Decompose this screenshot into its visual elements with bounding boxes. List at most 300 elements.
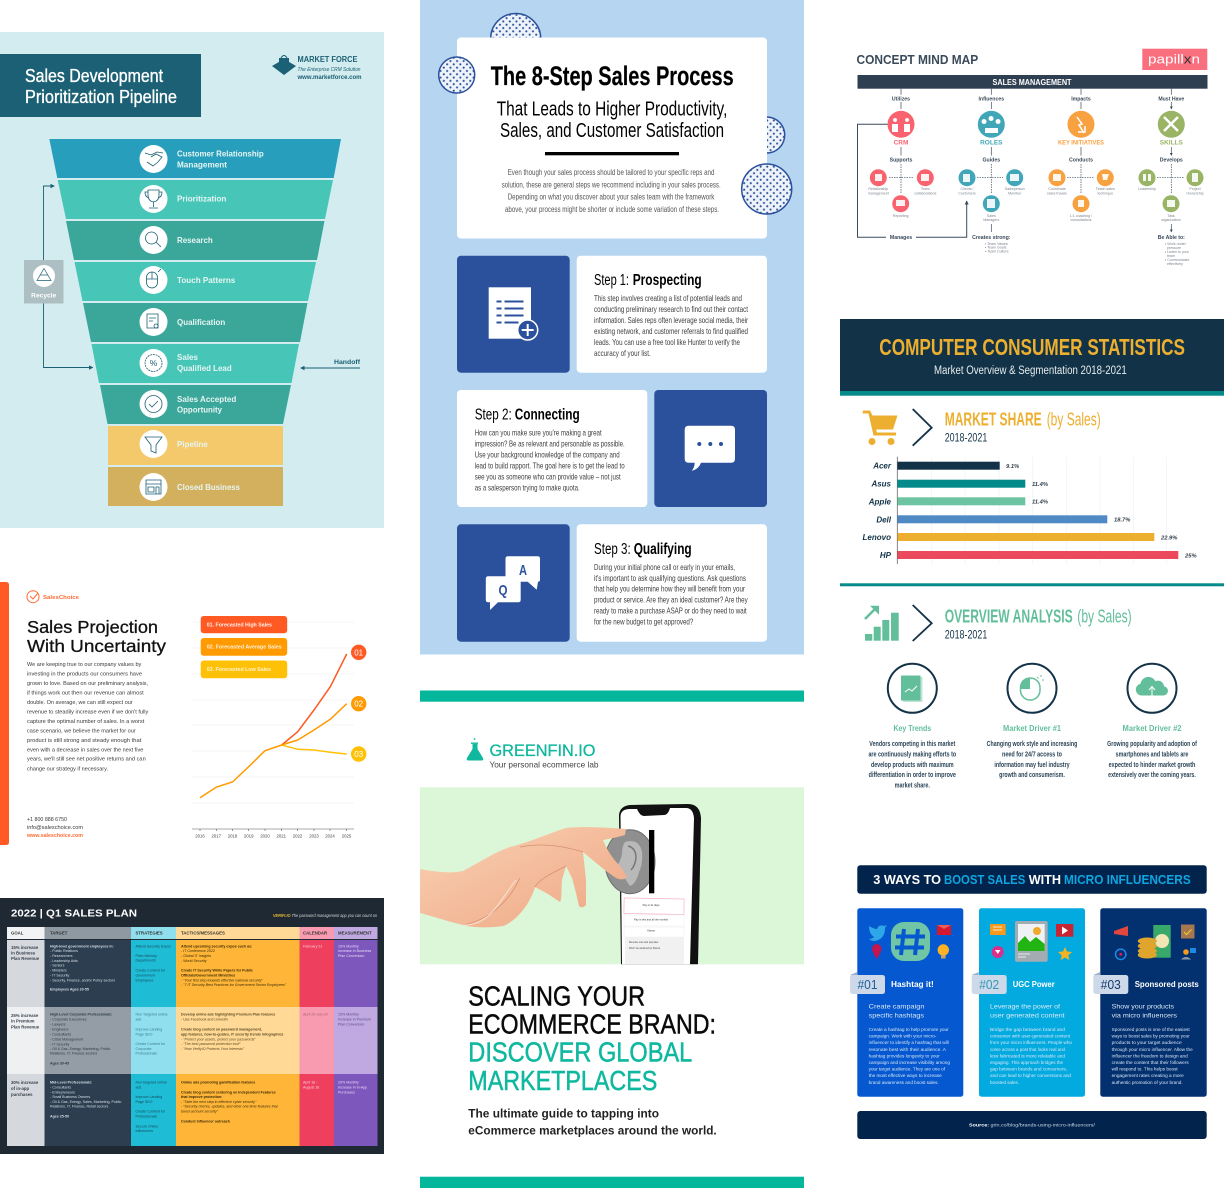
- strategies column: Professionals: [136, 1115, 157, 1119]
- step 3 card: that help you determine how they will benefit from your: [594, 585, 745, 594]
- step 1 card: Prospecting: [633, 272, 702, 289]
- header banner: WITH: [1029, 872, 1061, 887]
- calendar column: April 16 -: [303, 1081, 318, 1085]
- header banner: MICRO INFLUENCERS: [1064, 872, 1191, 887]
- table headers: GOAL: [11, 930, 24, 936]
- icons: hashtag, twitter, envelope, pin, bulb: [869, 922, 951, 961]
- skills branch: • Work under: [1165, 242, 1187, 246]
- funnel labels: Pipeline: [177, 439, 208, 449]
- subheading: The ultimate guide to tapping into: [468, 1109, 659, 1121]
- column: key trends: develop products with maximum: [871, 760, 954, 769]
- tactics column: app features, how-to-guides, IT security trends infographics: [181, 1032, 283, 1036]
- recycle loop arrows: [44, 186, 92, 368]
- recycle box: Recycle: [31, 292, 57, 300]
- strategies column: Page SEO: [136, 1100, 153, 1104]
- funnel labels: Closed Business: [177, 482, 240, 492]
- goal column: in Business: [11, 950, 36, 956]
- target column: Relations, IT, Finance, Retail sectors: [50, 1105, 109, 1109]
- tactics column: Online ads promoting gamification features: [181, 1081, 255, 1085]
- card 2 text: user generated content: [990, 1013, 1065, 1020]
- badge #01: #01: [858, 978, 878, 992]
- target column: Ages 30-45: [50, 1062, 69, 1066]
- roles branch: Managers: [983, 218, 999, 222]
- roles branch: • Team Values: [985, 242, 1008, 246]
- skills branch: organization: [1161, 218, 1181, 222]
- logo: Greenfin.io: [467, 738, 599, 770]
- relationship labels: Impacts: [1071, 97, 1091, 103]
- card 1 text: resonate best with their audience. A: [869, 1047, 946, 1052]
- sales management bar: [858, 75, 1208, 89]
- funnel labels: Prioritization: [177, 194, 226, 204]
- step 1 card: accuracy of your list.: [594, 349, 651, 358]
- market share heading: 2018-2021: [945, 431, 988, 445]
- logo: Market Force: MARKET FORCE: [298, 55, 358, 64]
- calendar column: [303, 944, 328, 1089]
- relationship labels: Conducts: [1069, 157, 1093, 163]
- panel: computer consumer statistics: [840, 319, 1224, 790]
- panel: Q1 sales plan: [0, 898, 384, 1154]
- strategies column: Secure Online: [136, 1124, 158, 1128]
- intro text: solution, these are general steps we recommend including in your sales process.: [502, 180, 721, 189]
- forecast legend: [201, 616, 287, 678]
- coin: [605, 830, 655, 894]
- intro text: Depending on what you discover about your sales team with the framework: [508, 193, 715, 202]
- contact details: info@saleschoice.com: [27, 825, 83, 831]
- strategies column: Page SEO: [136, 1032, 153, 1036]
- line chart: 2024: [325, 834, 335, 838]
- card 1 text: specific hashtags: [869, 1013, 925, 1020]
- heading: With Uncertainty: [27, 636, 166, 656]
- line chart: 2021: [277, 834, 287, 838]
- tactics column: - "Your first step towards effective national security": [181, 978, 263, 982]
- body text: even with a decrease in sales over the next five: [27, 747, 143, 753]
- step 1 card: This step involves creating a list of potential leads and: [594, 294, 742, 303]
- forecast legend: 03. Forecasted Low Sales: [207, 667, 271, 673]
- target column: - IT Security: [50, 1042, 70, 1046]
- target column: - Security, Finance, and/or Policy sectors: [50, 978, 115, 982]
- strategies column: Employees: [136, 978, 153, 982]
- header banner: BOOST SALES: [944, 872, 1026, 887]
- goal column: Plan Revenue: [11, 956, 40, 961]
- funnel labels: Qualification: [177, 317, 225, 327]
- goal column: 15% increase: [11, 945, 39, 950]
- strategies column: Improve Landing: [136, 1027, 162, 1031]
- target column: - Oil & Gas, Energy, Marketing, Public: [50, 1047, 110, 1051]
- roles branch: [958, 111, 1025, 254]
- badge #02: [972, 972, 1007, 994]
- card 1 text: [869, 1004, 951, 1085]
- step 1 card: leads. You can use a free tool like Hunter to verify the: [594, 338, 740, 347]
- goal column: purchases: [11, 1092, 33, 1097]
- overview analysis heading: 2018-2021: [945, 627, 988, 641]
- source bar: Source: grin.co/blog/brands-using-micro-influencers/: [969, 1123, 1096, 1129]
- step 2 card: impression? Be as relevant and personable as possible.: [475, 440, 625, 449]
- step 3 card: [577, 524, 767, 642]
- bar chart: market share: 18.7%: [1114, 518, 1130, 524]
- goal column: [11, 945, 40, 1097]
- handoff arrow: [301, 359, 361, 368]
- card 1 text: campaign. Work with your micro-: [869, 1034, 937, 1039]
- strategies column: ads: [136, 1018, 141, 1022]
- heading: [468, 981, 716, 1096]
- tactics column: - "The best password protection tool!": [181, 1042, 241, 1046]
- target column: - Consultants: [50, 1032, 71, 1036]
- strategies column: ads: [136, 1085, 141, 1089]
- tactics column: [181, 944, 287, 1123]
- bar chart: market share: HP: [880, 551, 892, 560]
- step 3 card: During your initial phone call or early in your emails,: [594, 563, 735, 572]
- bar chart: market share: 22.9%: [1160, 536, 1177, 542]
- target column: - Lawyers: [50, 1023, 66, 1027]
- percent glyph: %: [150, 358, 158, 368]
- measurement column: 20% Monthly: [338, 1081, 359, 1085]
- line chart: 2020: [260, 834, 270, 838]
- header band: Market Overview & Segmentation 2018-2021: [934, 365, 1127, 377]
- goal column: 30% increase: [11, 1080, 39, 1085]
- measurement column: 15% Monthly: [338, 1013, 359, 1017]
- card 1 text: brand awareness and boost sales.: [869, 1080, 939, 1085]
- hero image: hand with coin and phone: [420, 787, 804, 964]
- card 2 text: less fabricated is more relatable and: [990, 1053, 1066, 1058]
- main heading: That Leads to Higher Productivity,: [497, 99, 727, 121]
- card 3 text: engagement rates creating a more: [1112, 1073, 1184, 1078]
- forecast legend: 02. Forecasted Average Sales: [207, 645, 282, 651]
- handoff arrow: Handoff: [334, 359, 361, 366]
- panel: Greenfin ecommerce cover: [420, 690, 804, 1188]
- skills branch: pressure: [1167, 246, 1181, 250]
- strategies column: Run Targeted online: [136, 1013, 168, 1017]
- chevron: [913, 605, 932, 641]
- funnel stages: [49, 139, 341, 506]
- funnel labels: Touch Patterns: [177, 275, 236, 285]
- line chart: 01: [354, 648, 364, 657]
- strategies column: Create Content for: [136, 969, 166, 973]
- tactics column: that improve protection:: [181, 1095, 222, 1099]
- strategies column: Create Content for: [136, 1042, 166, 1046]
- tactics column: Attend upcoming security expos such as:: [181, 944, 252, 948]
- target column: - IT Security: [50, 974, 70, 978]
- target column: Ages 25-50: [50, 1115, 69, 1119]
- card 2 text: from your micro influencers. People who: [990, 1040, 1073, 1045]
- target column: - Oil & Gas, Energy, Sales, Marketing, Public: [50, 1100, 121, 1104]
- relationship labels: Creates strong:: [972, 235, 1011, 241]
- phone: Receive now and pay later: [629, 941, 659, 944]
- market share heading: MARKET SHARE: [945, 410, 1042, 430]
- forecast legend: 01. Forecasted High Sales: [207, 623, 272, 629]
- card 1 text: Create campaign: [869, 1004, 925, 1011]
- step 2 card: [457, 390, 647, 507]
- card 3: sponsored posts: [1093, 908, 1207, 1097]
- title: Sales Development Prioritization Pipeline: Prioritization Pipeline: [25, 87, 177, 107]
- calendar column: April 20-July 20: [303, 1013, 328, 1017]
- phone: [619, 804, 701, 964]
- contact details: +1 800 888 6750: [27, 817, 67, 823]
- card 1 text: the most effective ways to increase: [869, 1073, 942, 1078]
- target column: - Corporate Executives: [50, 1018, 87, 1022]
- line chart: [192, 622, 366, 838]
- bar chart: market share: 11.4%: [1032, 500, 1048, 506]
- relationship labels: Manages: [890, 235, 912, 241]
- skills branch: Leadership: [1138, 187, 1156, 191]
- line chart: 2016: [195, 834, 205, 838]
- phone: Won't be declined by Klarna: [629, 947, 661, 950]
- strategies column: [136, 944, 171, 1133]
- table headers: [11, 930, 372, 936]
- target column: - Engineers: [50, 1028, 69, 1032]
- section divider: [840, 583, 1224, 586]
- intro text: above, your process might be shorter or include some variation of these steps.: [505, 205, 719, 214]
- column: key trends: Key Trends: [893, 724, 932, 733]
- logo: Greenfin.io: Your personal ecommerce lab: [490, 761, 599, 770]
- body text: capture the optimal number of sales. In a worst: [27, 719, 145, 725]
- skills branch: Ownership: [1186, 191, 1204, 195]
- target column: - Public Relations: [50, 949, 78, 953]
- funnel labels: Opportunity: [177, 404, 222, 414]
- hand: [420, 827, 627, 927]
- skills branch: [1138, 111, 1204, 266]
- badge #03: [1093, 972, 1128, 994]
- card 1 text: hashtag provides longevity to your: [869, 1053, 940, 1058]
- header banner: 3 WAYS TO: [873, 872, 941, 887]
- target column: Mid-Level Professionals:: [50, 1081, 92, 1085]
- card 3: sponsored posts: Sponsored posts: [1135, 980, 1199, 989]
- overview analysis heading: OVERVIEW ANALYSIS: [945, 606, 1073, 626]
- bar chart: market share: Asus: [870, 480, 892, 489]
- body text: change our strategy if necessary.: [27, 766, 108, 772]
- column: key trends: market share.: [895, 780, 930, 790]
- CRM branch: management: [868, 191, 889, 195]
- heading: SCALING YOUR: [468, 981, 645, 1012]
- plan title: [11, 909, 378, 920]
- contact details: www.saleschoice.com: [26, 833, 83, 839]
- skills branch: SKILLS: [1160, 140, 1184, 147]
- card 3 text: [1112, 1004, 1193, 1085]
- panel: micro influencers: [850, 865, 1207, 1139]
- card 1: hashtag it: [850, 908, 963, 1097]
- tactics column: - Use Facebook and LinkedIn: [181, 1018, 228, 1022]
- tactics column: - World Security: [181, 959, 207, 963]
- heading: DISCOVER GLOBAL: [468, 1037, 692, 1068]
- target column: High-Level Corporate Professionals:: [50, 1013, 112, 1017]
- phone: Pay in 4x days: [643, 903, 660, 907]
- decorative circles over card: [439, 57, 792, 214]
- table headers: TARGET: [50, 930, 68, 936]
- intro text: Even though your sales process should be tailored to your specific reps and: [508, 168, 714, 177]
- orange accent bar: [0, 582, 9, 845]
- card 2 text: Leverage the power of: [990, 1004, 1060, 1011]
- funnel labels: [177, 148, 264, 492]
- measurement column: Increase in Business: [338, 949, 371, 953]
- tactics column: Officials/Government Ministries: [181, 973, 235, 977]
- calendar column: August 16: [303, 1085, 319, 1089]
- column: key trends: [868, 664, 956, 790]
- target column: - Crisis Management: [50, 1037, 83, 1041]
- heading: [27, 617, 166, 656]
- column: market driver 1: Market Driver #1: [1003, 724, 1061, 733]
- subheading: eCommerce marketplaces around the world.: [468, 1125, 717, 1137]
- logo: Market Force: The Enterprise CRM Solution: [298, 67, 361, 73]
- phone: Pay in this and all the months: [634, 918, 669, 922]
- roles branch: Salesperson: [1005, 187, 1025, 191]
- line chart: 2018: [228, 834, 238, 838]
- divider: [545, 152, 679, 155]
- relationship labels: [890, 97, 1185, 241]
- step 3 card: Step 3:: [594, 541, 631, 558]
- card 2 text: boosted sales.: [990, 1080, 1019, 1085]
- market share heading: [945, 410, 1101, 445]
- body text: double. On average, we can still expect our: [27, 700, 133, 706]
- skills branch: Task: [1167, 214, 1175, 218]
- bar chart: market share: Lenovo: [863, 533, 891, 542]
- bar chart: market share: 9.1%: [1006, 464, 1019, 470]
- roles branch: • Team Goals: [985, 246, 1007, 250]
- heading: Sales Projection: [27, 617, 158, 637]
- header band: [840, 319, 1224, 396]
- bar chart: market share: [863, 457, 1197, 564]
- body text: revenue to steadily increase even if we don't fully: [27, 709, 149, 715]
- strategies column: Corporate: [136, 1047, 151, 1051]
- strategies column: Government: [136, 973, 155, 977]
- step 3 icon: Q and A bubbles: A: [519, 562, 527, 579]
- intro text: [502, 168, 721, 214]
- card 1: hashtag it: Hashtag it!: [891, 980, 934, 989]
- logo: Market Force: www.marketforce.com: [296, 75, 362, 81]
- icons: picture, note, video, heart, star: [990, 921, 1073, 962]
- line chart: 02: [354, 700, 364, 709]
- tactics column: - Global IT Insights: [181, 954, 211, 958]
- column: market driver 1: Changing work style and increasing: [987, 739, 1078, 748]
- roles branch: • Team Culture: [985, 250, 1009, 254]
- card 1 text: your target audience. They are one of: [869, 1067, 946, 1072]
- column: market driver 1: need for 24/7 access to: [1002, 750, 1062, 758]
- roles branch: ROLES: [980, 140, 1003, 147]
- recycle box: [24, 260, 64, 304]
- line chart: 2017: [212, 834, 222, 838]
- relationship labels: Utilizes: [892, 97, 910, 103]
- card 1 text: campaign and increase visibility among: [869, 1060, 951, 1065]
- subheading: [468, 1109, 717, 1137]
- bar chart: market share: Acer: [872, 462, 892, 471]
- target column: Employees Ages 20-55: [50, 988, 89, 992]
- target column: - Ministers: [50, 969, 67, 973]
- badge #01: [850, 972, 885, 994]
- card 2 text: consumer with user-generated content: [990, 1034, 1071, 1039]
- skills branch: Project: [1189, 187, 1201, 191]
- relationship labels: Must Have: [1158, 97, 1184, 103]
- funnel labels: Research: [177, 235, 213, 245]
- relationship labels: Develops: [1160, 157, 1183, 163]
- tactics column: Create blog content centering on Independent Features: [181, 1090, 276, 1094]
- key initiatives branch: KEY INITIATIVES: [1058, 140, 1105, 147]
- target column: High-level government employees in:: [50, 944, 114, 948]
- roles branch: Member: [1008, 191, 1022, 195]
- source bar: [857, 1111, 1207, 1139]
- strategies column: Departments: [136, 959, 156, 963]
- step 2 card: as a salesperson trying to make quota.: [475, 483, 580, 492]
- measurement column: Plan Conversion: [338, 954, 364, 958]
- step 3 card: Qualifying: [634, 541, 692, 558]
- card 3 text: via micro influencers: [1112, 1013, 1178, 1020]
- target column: - Entrepreneurs: [50, 1090, 75, 1094]
- badge #02: #02: [979, 978, 999, 992]
- tactics column: - "7 IT Security Best Practices for Government Sector Employees": [181, 983, 287, 987]
- strategies column: Run targeted online: [136, 1081, 167, 1085]
- panel: sales projection: [0, 582, 366, 845]
- panel: sales development pipeline: [0, 32, 384, 528]
- card 3 text: through your micro influencer. Allow the: [1112, 1047, 1193, 1052]
- funnel icons: [145, 152, 163, 494]
- relationship labels: Be Able to:: [1158, 235, 1185, 241]
- tactics column: Create blog content on password management,: [181, 1027, 262, 1031]
- card 2 text: come across a post that looks real and: [990, 1047, 1066, 1052]
- column: key trends: are continuously making efforts to: [868, 750, 956, 758]
- relationship labels: Supports: [890, 157, 912, 163]
- measurement column: 15% Monthly: [338, 944, 359, 948]
- card 2 text: Bridge the gap between brand and: [990, 1027, 1066, 1032]
- card 3 text: create the content that their followers: [1112, 1060, 1189, 1065]
- card 2 text: engaging. This approach bridges the: [990, 1060, 1064, 1065]
- plan title: 2022 | Q1 SALES PLAN: [11, 909, 137, 920]
- body text: case scenario, we believe the market for our: [27, 728, 136, 734]
- bar chart: market share: 11.4%: [1032, 482, 1048, 488]
- bottom teal band: [420, 1177, 804, 1188]
- key initiatives branch: Teach sales: [1096, 187, 1115, 191]
- strategies column: Attend Security Expos: [136, 944, 171, 948]
- step 2 icon: chat bubble: [654, 390, 767, 507]
- measurement column: Purchases: [338, 1090, 355, 1094]
- CRM branch: Reporting: [893, 214, 908, 218]
- papillon logo: papill xn: [1148, 52, 1200, 66]
- body text: investing in the products our consumers have: [27, 671, 142, 677]
- overview analysis heading: (by Sales): [1077, 606, 1132, 626]
- column: key trends: Vendors competing in this market: [869, 739, 956, 748]
- logo: Greenfin.io: GREENFIN.IO: [490, 741, 596, 760]
- step 1 card: [577, 256, 767, 373]
- body text: years, we'll still see net positive returns and can: [27, 757, 146, 763]
- card 3 text: Sponsored posts is one of the easiest: [1112, 1027, 1191, 1032]
- title: Sales Development Prioritization Pipeline: [0, 54, 201, 117]
- header banner: [857, 865, 1207, 894]
- body text: if things work out then our revenue can almost: [27, 691, 144, 697]
- strategies column: Create Content for: [136, 1110, 166, 1114]
- chevron: [913, 409, 932, 446]
- card 1 text: Create a hashtag to help promote your: [869, 1027, 949, 1032]
- strategies column: Improve Landing: [136, 1095, 162, 1099]
- main heading: Sales, and Customer Satisfaction: [500, 120, 724, 142]
- roles branch: Clients /: [961, 187, 973, 191]
- column: market driver 2: Market Driver #2: [1122, 724, 1182, 733]
- goal column: 25% increase: [11, 1013, 39, 1018]
- goal column: in Premium: [11, 1018, 35, 1024]
- skills branch: • Communicate: [1165, 258, 1189, 262]
- table headers: TACTICS/MESSAGES: [181, 930, 225, 936]
- body text: product is still strong and steady enough that: [27, 738, 142, 744]
- column: market driver 2: [1107, 664, 1197, 779]
- card 3 text: influencer the freedom to design and: [1112, 1053, 1188, 1058]
- target column: - Researchers: [50, 954, 73, 958]
- bar chart: market share: Apple: [868, 498, 892, 506]
- step 1 icon: list document: [457, 256, 570, 373]
- step 1 card: existing network, and customer referrals to find qualified: [594, 327, 748, 336]
- table headers: CALENDAR: [303, 930, 328, 936]
- decorative circles behind card: [491, 14, 785, 153]
- key initiatives branch: 1:1 coaching /: [1070, 214, 1092, 218]
- measurement column: [338, 944, 371, 1094]
- tactics column: - "Take the next step in effective cyber security": [181, 1100, 257, 1104]
- main heading: The 8-Step Sales Process: [491, 61, 734, 91]
- roles branch: Customers: [958, 191, 976, 195]
- table headers: MEASUREMENT: [338, 930, 372, 936]
